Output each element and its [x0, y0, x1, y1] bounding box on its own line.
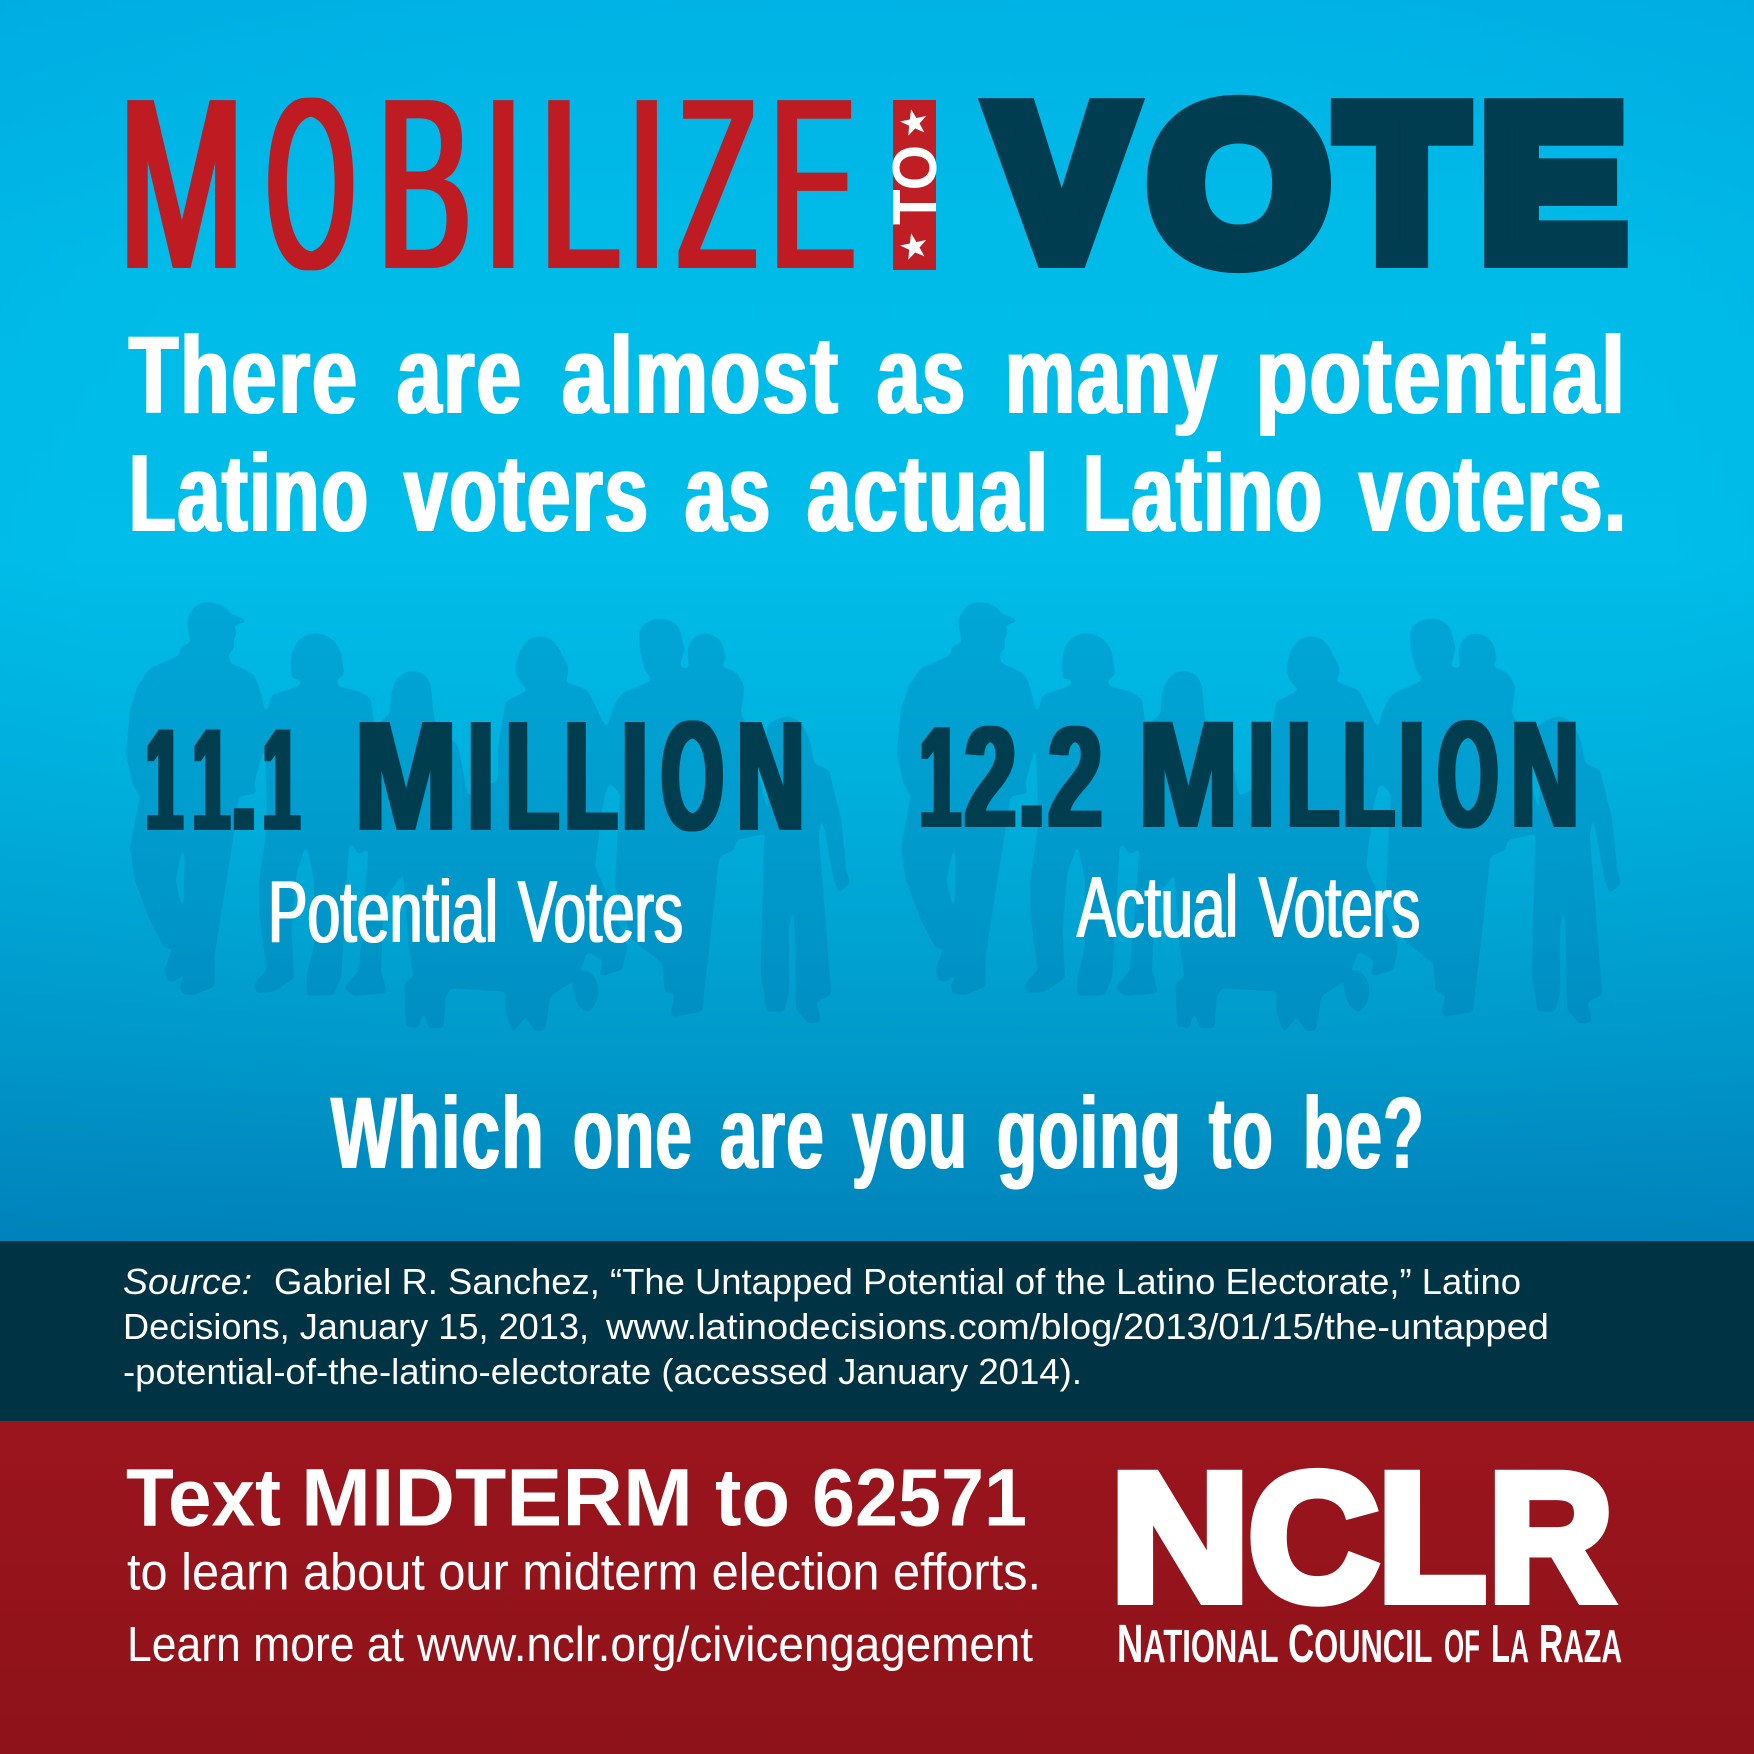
label: Potential Voters: Potential	[268, 862, 498, 961]
figure: 12.2 MILLION: M	[1138, 689, 1238, 860]
logo: NCLR: N	[1110, 1435, 1250, 1639]
call to action: subtext: to learn about our midterm election efforts.	[127, 1544, 1041, 1602]
figure: 12.2 MILLION: L	[1343, 689, 1395, 860]
figure: 11.1 MILLION: .	[230, 698, 258, 861]
silhouettes: right group of people	[897, 602, 1621, 1033]
label: Potential Voters: Voters	[518, 862, 683, 961]
headline line 2: voters	[404, 432, 650, 555]
source citation text: -potential-of-the-latino-electorate (accessed January 2014).	[123, 1351, 1082, 1392]
figure: 12.2 MILLION: L	[1287, 689, 1339, 860]
headline line 2: Latino	[1083, 432, 1324, 555]
figure: 11.1 MILLION: 1	[263, 698, 300, 861]
logo name: National Council of La Raza: COUNCIL	[1288, 1614, 1490, 1674]
background	[0, 0, 1754, 1242]
title word: VOTE: O	[1150, 63, 1328, 306]
source citation text: www.latinodecisions.com/blog/2013/01/15/the-untapped	[605, 1306, 1549, 1347]
call to action: web address: www.nclr.org/civicengagement	[416, 1617, 1033, 1672]
title: Mobilize to Vote	[119, 47, 1624, 320]
figure: 11.1 MILLION: N	[737, 689, 805, 864]
question: which one are you going to be: going	[997, 1076, 1182, 1190]
figure: 12.2 MILLION: O	[1438, 689, 1498, 860]
question: which one are you going to be: Which	[331, 1076, 545, 1190]
figure: 12.2 MILLION: I	[1248, 689, 1274, 860]
title word: MOBILIZE: Z	[678, 47, 756, 320]
figure: 11.1 MILLION: L	[506, 689, 559, 864]
figure: 11.1 MILLION: 1	[146, 698, 182, 861]
badge: TO with stars: TO	[881, 145, 950, 225]
headline line 1: almost	[562, 314, 840, 437]
source citation text: Decisions, January 15, 2013,	[123, 1306, 589, 1347]
panel: call to action band	[0, 1421, 1754, 1754]
title word: VOTE: E	[1482, 64, 1624, 301]
question: which one are you going to be: to	[1209, 1076, 1274, 1190]
logo name: National Council of La Raza: LA	[1491, 1614, 1541, 1674]
statistic: 12.2 million actual voters	[920, 689, 1579, 956]
source citation text: Source:	[123, 1261, 252, 1302]
question: which one are you going to be: one	[573, 1076, 693, 1190]
headline line 2: voters.	[1359, 432, 1628, 555]
panel: source band	[0, 1241, 1754, 1421]
source citation text: Gabriel R. Sanchez, “The Untapped Potential of the Latino Electorate,” Latino	[274, 1261, 1521, 1302]
headline line 1: as	[877, 314, 967, 437]
figure: 11.1 MILLION: I	[467, 689, 494, 864]
headline line 2: as	[685, 432, 772, 555]
title word: MOBILIZE: E	[771, 47, 855, 320]
call to action: text MIDTERM: Text	[126, 1452, 281, 1544]
label: Actual Voters: Actual	[1077, 859, 1238, 956]
figure: 12.2 MILLION: 2	[1048, 696, 1102, 858]
question: which one are you going to be: be?	[1303, 1076, 1425, 1190]
label: Actual Voters: Voters	[1259, 859, 1420, 956]
headline line 2: actual	[807, 432, 1050, 555]
headline line 1: potential	[1256, 314, 1627, 437]
logo: NCLR: L	[1378, 1435, 1486, 1639]
figure: 11.1 MILLION: I	[621, 689, 648, 864]
logo name: National Council of La Raza: RAZA	[1539, 1614, 1658, 1674]
figure: 12.2 MILLION: I	[1398, 689, 1425, 860]
badge: TO with stars	[881, 100, 950, 270]
figure: 11.1 MILLION: 1	[193, 698, 230, 861]
figure: 12.2 MILLION: 2	[964, 696, 1016, 858]
logo: NCLR: C	[1248, 1435, 1379, 1639]
headline line 2: Latino	[129, 432, 370, 555]
headline line 1: many	[1005, 314, 1219, 437]
title word: VOTE: T	[1340, 64, 1464, 301]
figure: 12.2 MILLION: N	[1511, 689, 1579, 860]
source citation text	[123, 1261, 1549, 1392]
logo name: National Council of La Raza: NATIONAL	[1117, 1614, 1343, 1674]
headline line 1: There	[129, 314, 359, 437]
figure: 12.2 MILLION: .	[1018, 696, 1046, 858]
silhouettes: left group of people	[126, 602, 850, 1033]
figure: 11.1 MILLION: M	[354, 689, 457, 864]
call to action: text MIDTERM: to	[715, 1452, 790, 1544]
call to action: web address: Learn more at	[127, 1617, 404, 1672]
figure: 12.2 MILLION: 1	[920, 696, 960, 858]
headline line 1: are	[397, 314, 523, 437]
question: which one are you going to be: you	[852, 1076, 968, 1190]
title word: MOBILIZE: O	[267, 47, 355, 320]
title word: MOBILIZE: L	[540, 47, 620, 320]
title word: MOBILIZE: B	[378, 47, 471, 320]
title word: MOBILIZE: I	[485, 47, 522, 320]
logo: NCLR: R	[1488, 1435, 1614, 1639]
figure: 11.1 MILLION: L	[564, 689, 617, 864]
figure: 11.1 MILLION: O	[661, 689, 723, 864]
call to action: text MIDTERM: 62571	[812, 1452, 1027, 1544]
title word: VOTE: V	[993, 64, 1130, 301]
title word: MOBILIZE: M	[119, 47, 244, 320]
headline	[129, 314, 1628, 555]
call to action: text MIDTERM: MIDTERM	[301, 1452, 693, 1544]
statistic: 11.1 million potential voters	[146, 689, 805, 961]
logo: NCLR	[1110, 1435, 1622, 1674]
title word: MOBILIZE: I	[628, 47, 665, 320]
logo name: National Council of La Raza: OF	[1444, 1620, 1480, 1672]
question: which one are you going to be: are	[720, 1076, 825, 1190]
